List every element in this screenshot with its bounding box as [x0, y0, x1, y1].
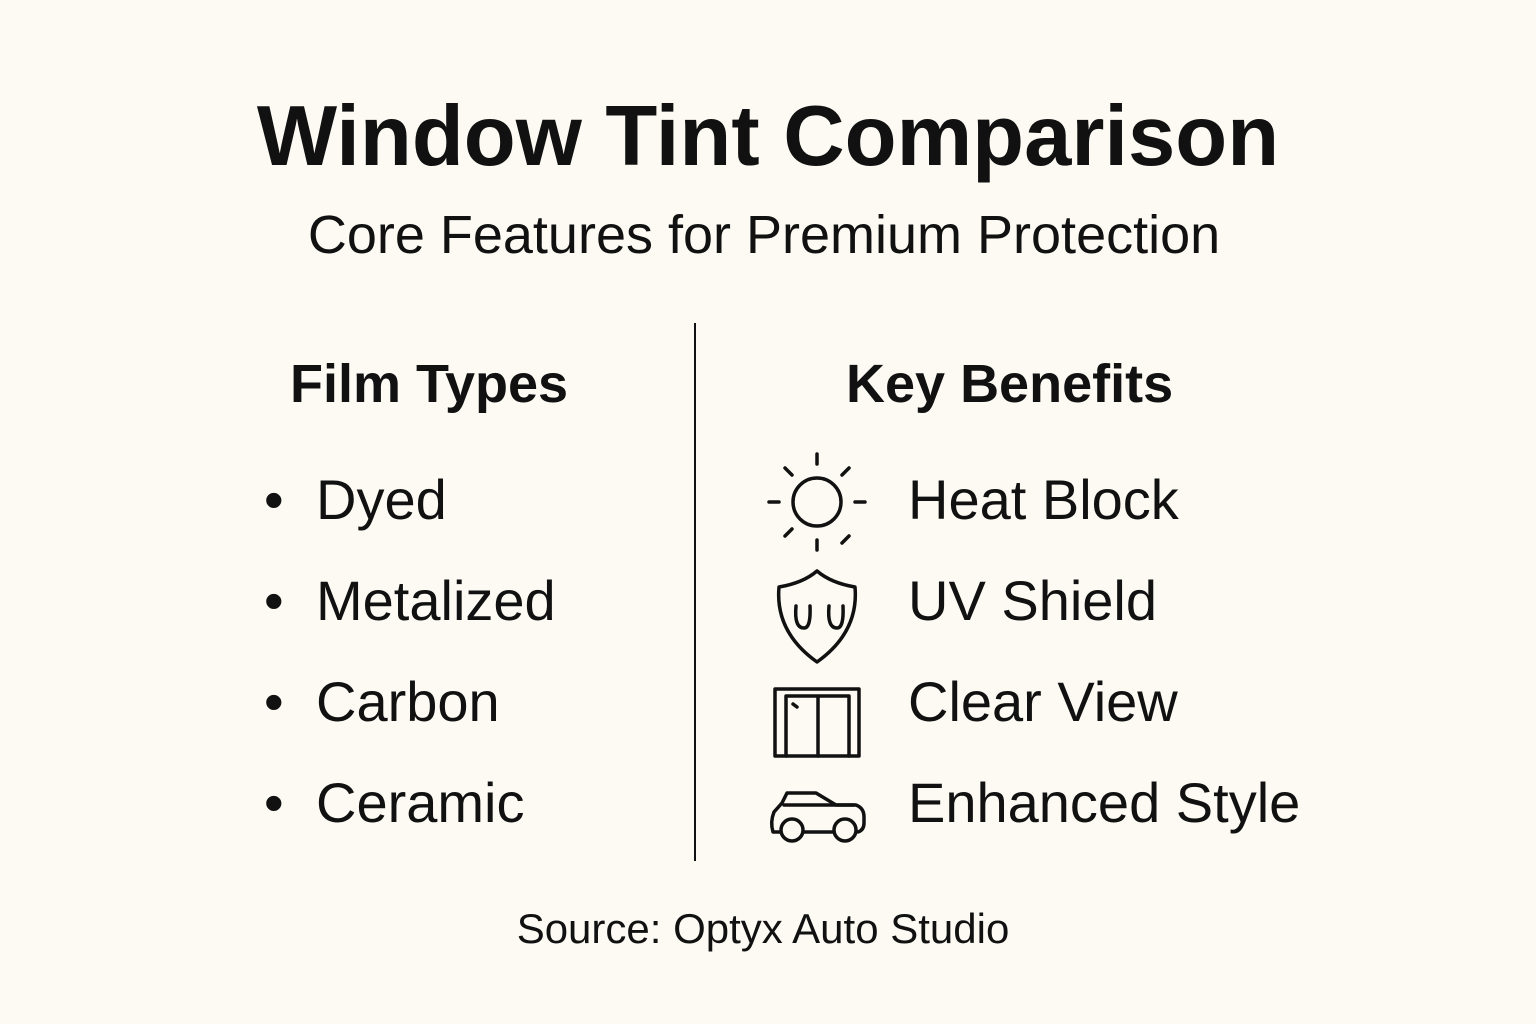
list: benefits text: Heat Block	[908, 468, 1179, 531]
panel: key benefits	[846, 354, 1300, 834]
list: film types	[264, 468, 556, 834]
list: film types: Ceramic	[316, 771, 524, 834]
list: benefits text: Clear View	[908, 670, 1178, 733]
icon: car	[772, 793, 864, 841]
list: film types: •	[264, 670, 284, 733]
divider	[694, 323, 696, 861]
list: benefits text	[908, 468, 1300, 834]
list: film types: •	[264, 771, 284, 834]
heading: film types: Film Types	[290, 354, 568, 414]
source: Source: Optyx Auto Studio	[517, 905, 1009, 952]
icon: sun	[769, 454, 865, 550]
list: benefits text: UV Shield	[908, 569, 1157, 632]
heading: key benefits: Key Benefits	[846, 354, 1173, 414]
list: film types: Metalized	[316, 569, 556, 632]
icon: uv shield	[779, 571, 855, 662]
list: film types: Dyed	[316, 468, 447, 531]
subtitle: Core Features for Premium Protection	[308, 205, 1220, 265]
list: film types: •	[264, 569, 284, 632]
panel: film types	[264, 354, 568, 834]
list: benefits text: Enhanced Style	[908, 771, 1300, 834]
title: Window Tint Comparison	[257, 89, 1279, 184]
list: film types: Carbon	[316, 670, 500, 733]
list: film types: •	[264, 468, 284, 531]
icon: window	[775, 689, 859, 756]
